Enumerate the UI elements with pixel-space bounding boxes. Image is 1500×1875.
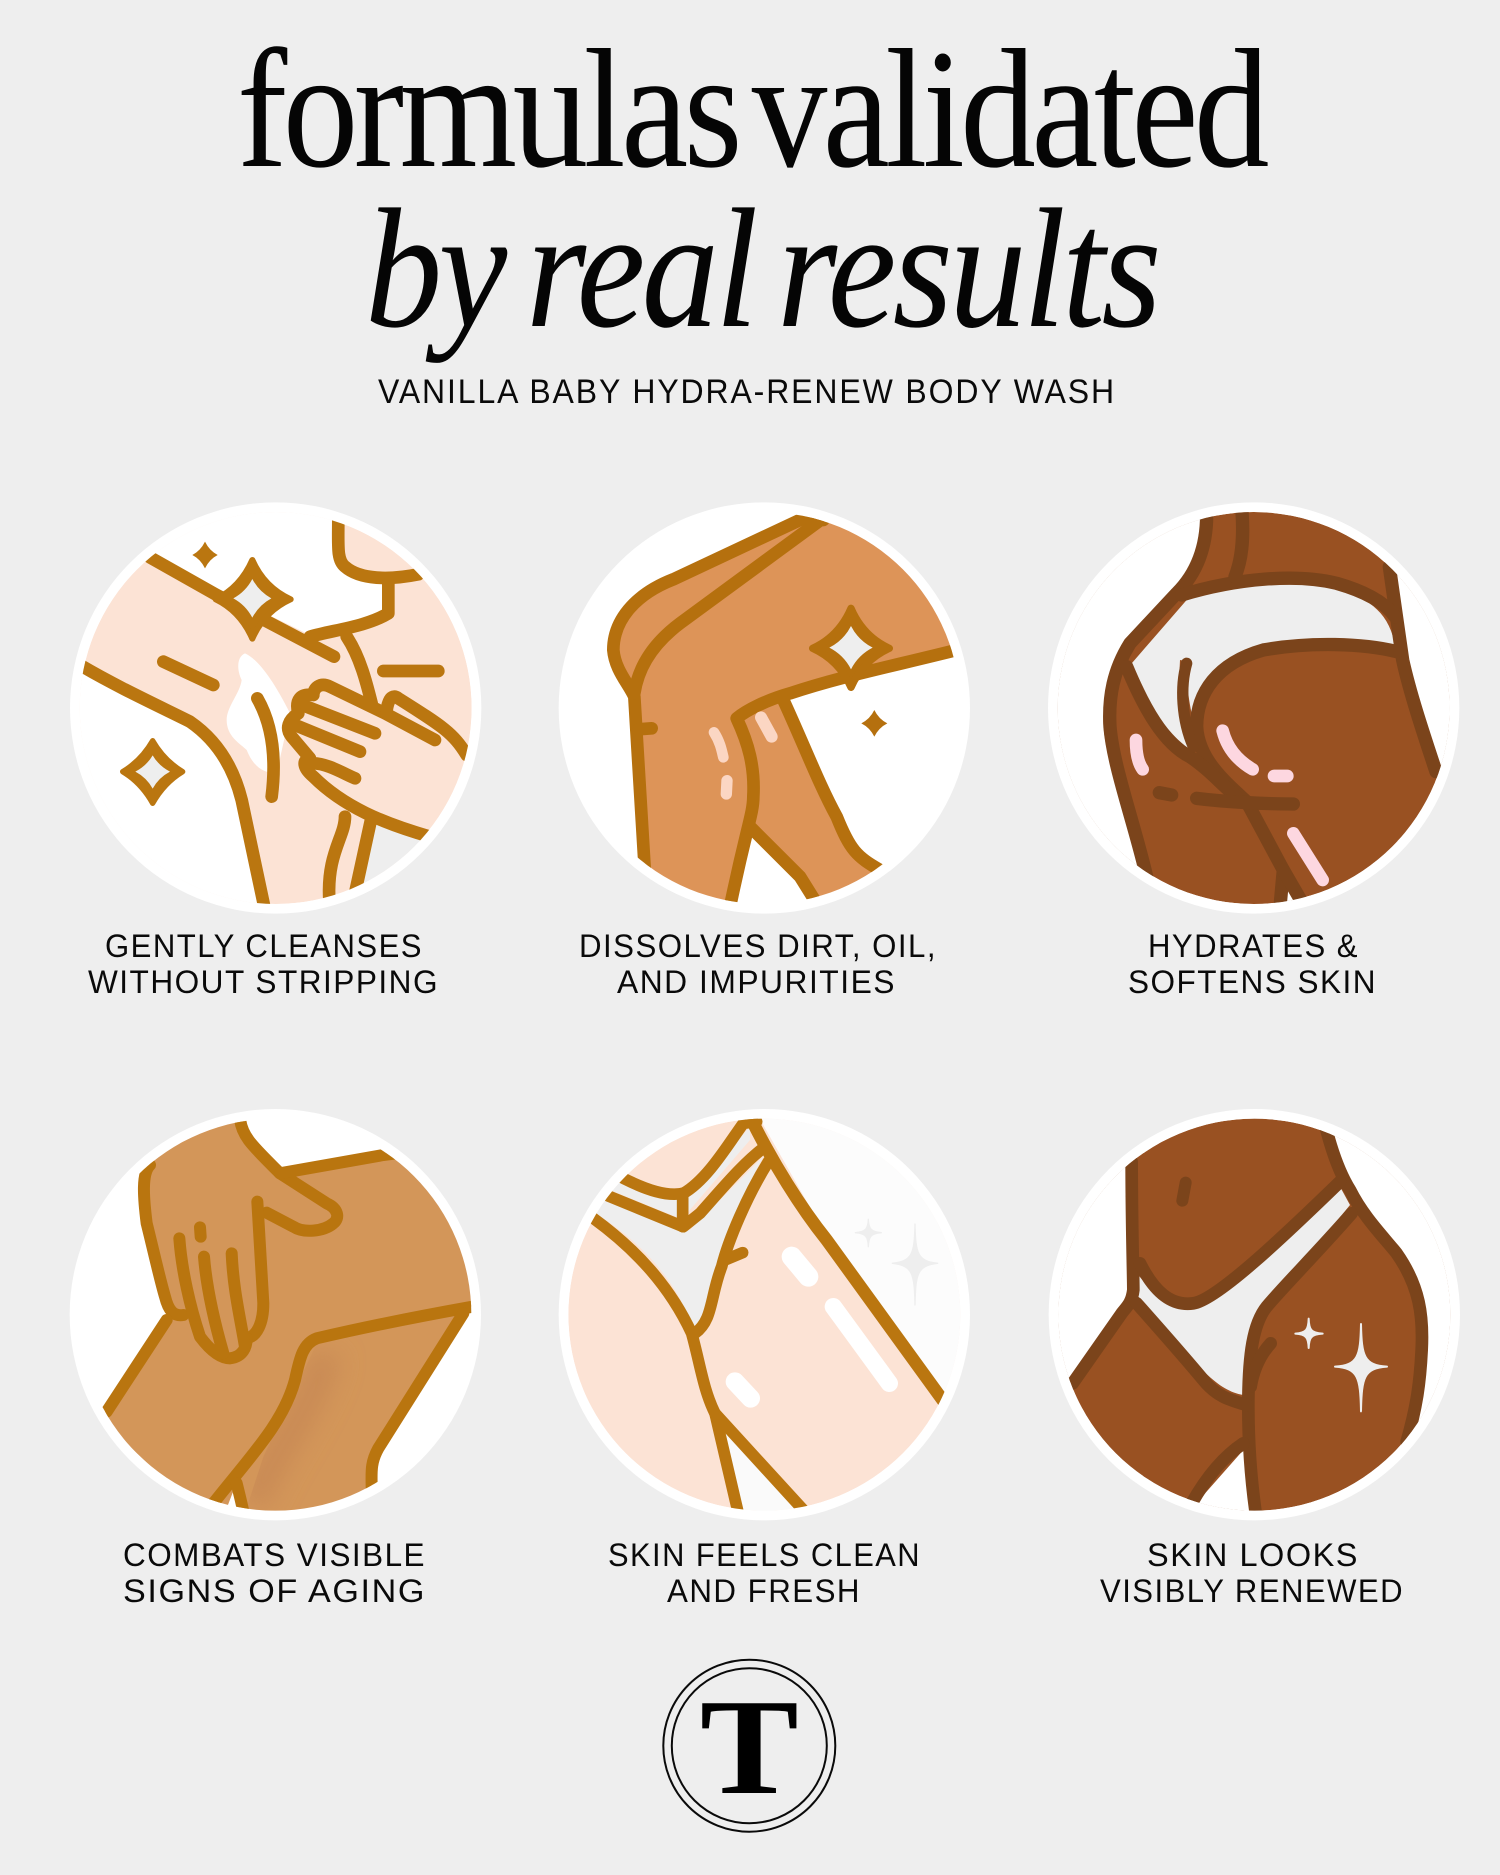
logo: T monogram in double ring xyxy=(663,1660,835,1832)
caption: SKIN LOOKS xyxy=(1147,1537,1359,1573)
caption: VISIBLY RENEWED xyxy=(1100,1573,1404,1609)
subtitle: VANILLA BABY HYDRA-RENEW BODY WASH xyxy=(378,373,1116,411)
caption: DISSOLVES DIRT, OIL, xyxy=(579,928,937,964)
illustration: deep-toned hip and underwear xyxy=(1048,502,1460,914)
icon: faint sparkles xyxy=(855,1219,938,1305)
caption xyxy=(579,928,937,1000)
caption xyxy=(88,928,439,1000)
caption: GENTLY CLEANSES xyxy=(105,928,423,964)
logo: T monogram in double ring: T xyxy=(700,1671,799,1823)
caption xyxy=(123,1537,426,1609)
illustration: hands massaging foam on knee xyxy=(50,480,481,914)
panel: skin looks visibly renewed xyxy=(1048,1109,1460,1602)
caption: HYDRATES & xyxy=(1148,928,1359,964)
title: by real results xyxy=(365,174,1158,363)
panel: dissolves dirt xyxy=(559,502,980,1000)
illustration: bent knee xyxy=(559,502,980,920)
panel: hydrates and softens xyxy=(1048,502,1460,994)
illustration: deep-toned torso and hip xyxy=(1048,1109,1460,1520)
title: formulas validated xyxy=(237,15,1268,203)
panel: skin feels clean and fresh xyxy=(558,1109,970,1602)
illustration: light-toned hip and thigh xyxy=(558,1109,970,1520)
caption xyxy=(1128,928,1377,1000)
illustration: hand on knee xyxy=(70,1109,481,1520)
caption: SKIN FEELS CLEAN xyxy=(608,1537,921,1573)
panel: gently cleanses xyxy=(50,480,481,1000)
caption: AND IMPURITIES xyxy=(617,964,896,1000)
caption xyxy=(1100,1537,1404,1609)
title xyxy=(237,15,1268,363)
caption: SIGNS OF AGING xyxy=(123,1573,426,1609)
icon: sparkles xyxy=(1295,1319,1387,1411)
caption: WITHOUT STRIPPING xyxy=(88,964,439,1000)
icon: sparkles xyxy=(813,608,889,737)
caption: AND FRESH xyxy=(667,1573,861,1609)
caption: SOFTENS SKIN xyxy=(1128,964,1377,1000)
caption: COMBATS VISIBLE xyxy=(123,1537,426,1573)
caption xyxy=(608,1537,921,1609)
panel: combats visible signs of aging xyxy=(70,1109,517,1609)
icon: sparkles xyxy=(123,542,291,803)
